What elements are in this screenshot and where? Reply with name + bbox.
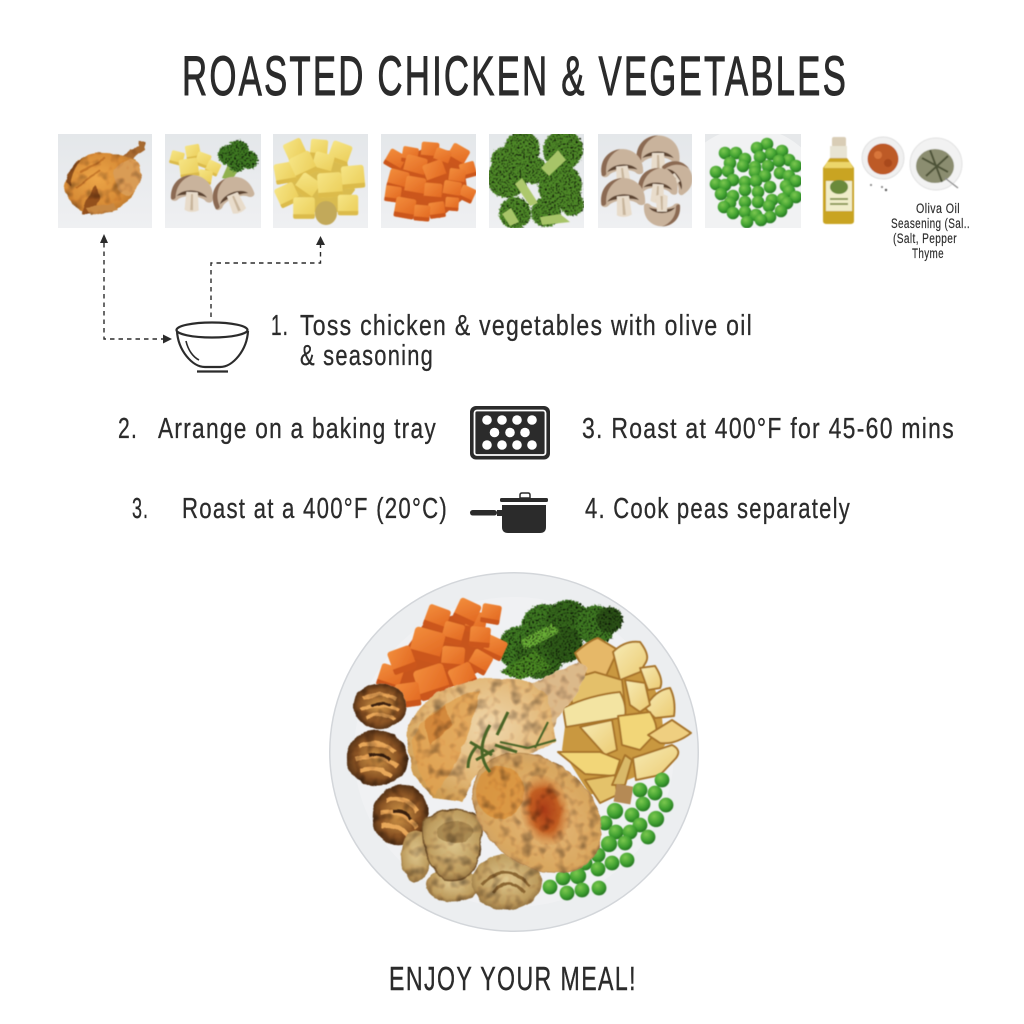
step 4 text: 4. Cook peas separately [585,493,851,525]
plate [329,572,699,932]
roasted food: mushrooms [343,683,542,910]
icon: baking tray [470,406,550,460]
step 1 text: & seasoning [300,340,434,372]
icon: olive oil bottle and seasoning bowls [823,137,962,224]
seasoning label: Oliva Oil [916,201,960,216]
step 2 text: Arrange on a baking tray [158,413,437,445]
panel: ingredient photo potatoes, broccoli and mushrooms [165,134,261,228]
step 1 text [271,310,753,372]
finished dish plate [329,572,699,932]
panel: ingredient photo carrot cubes [381,134,476,228]
panel: ingredient photo potato cubes [273,134,368,228]
step 2 text: 2. [118,413,138,445]
seasoning label [891,201,970,261]
herb garnish [468,712,556,772]
panel: ingredient photo green peas [705,134,801,228]
roasted food: potatoes [558,638,691,804]
closing message: ENJOY YOUR MEAL! [389,960,637,997]
panel: ingredient photo sliced mushrooms [598,134,692,228]
arrow: chicken to bowl [100,234,172,344]
panel: ingredient photo broccoli florets [489,134,584,228]
panel: ingredient photo whole roasted chicken [58,134,152,228]
roasted food: broccoli [498,600,623,680]
seasoning label: Seasening (Sal.. [891,216,970,231]
step 1 text: 1. [271,310,289,342]
step 1 text: Toss chicken & vegetables with olive oil [300,310,753,342]
seasoning label: Thyme [912,246,944,261]
roasted chicken [407,662,625,898]
step 3 text: roast temperature: Roast at a 400°F (20°C) [182,493,448,525]
icon: mixing bowl [176,322,248,372]
step 3 text: roast temperature [132,493,448,525]
icon: cooking pot [470,493,548,533]
roasted food: carrots [376,597,509,709]
seasoning label: (Salt, Pepper [893,231,957,246]
step 3 text: roast temperature: 3. [132,493,149,525]
arrow: bowl to potatoes [211,236,325,317]
roasted food: peas [543,773,673,900]
